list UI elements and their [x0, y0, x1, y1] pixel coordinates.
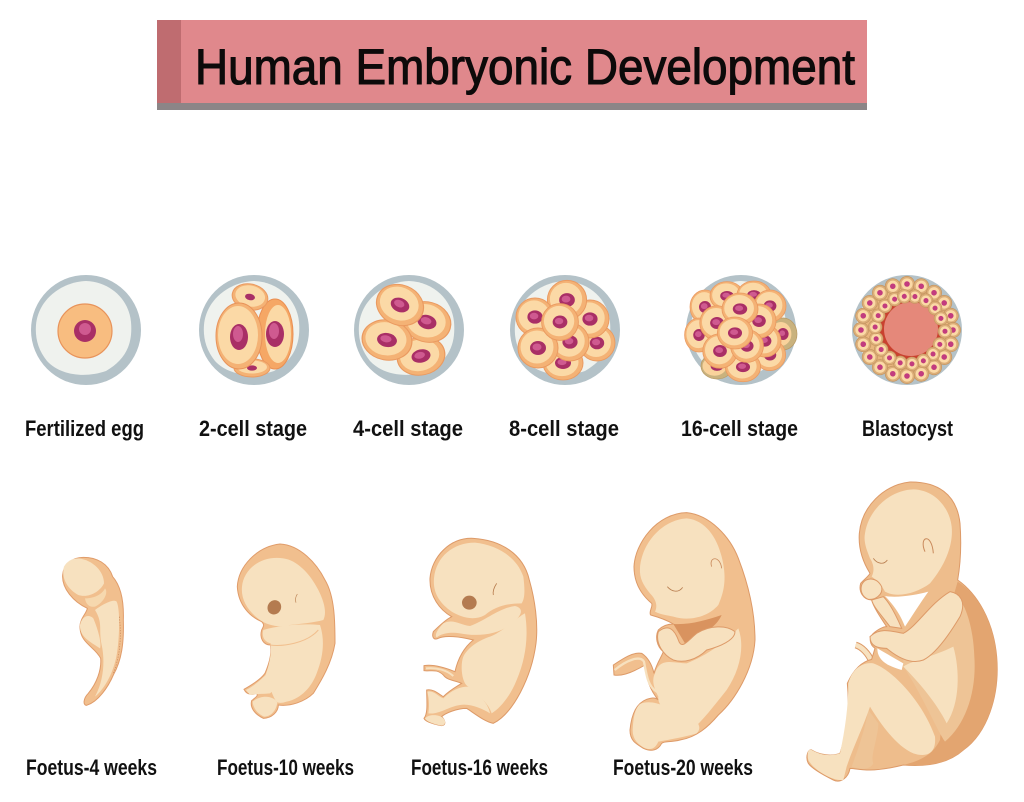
stage: blastocyst	[852, 275, 962, 441]
label: 16-cell stage: 16-cell stage	[681, 416, 798, 441]
label: blastocyst: Blastocyst	[862, 416, 954, 441]
label: 2-cell stage: 2-cell stage	[199, 416, 307, 441]
label: foetus 10 weeks: Foetus-10 weeks	[217, 755, 354, 780]
foetus at 20 weeks	[613, 513, 755, 780]
title banner	[157, 20, 867, 110]
stage: fertilized egg	[25, 275, 144, 441]
stage: 4-cell	[353, 275, 464, 441]
foetus at 16 weeks	[411, 538, 548, 780]
stage: 2-cell	[199, 275, 309, 441]
stage: 16-cell	[681, 275, 798, 441]
label: 4-cell stage: 4-cell stage	[353, 416, 463, 441]
label: 8-cell stage: 8-cell stage	[509, 416, 619, 441]
title: Human Embryonic Development	[195, 39, 855, 95]
label: foetus 20 weeks: Foetus-20 weeks	[613, 755, 753, 780]
stage: 8-cell	[509, 275, 620, 441]
label: foetus 16 weeks: Foetus-16 weeks	[411, 755, 548, 780]
foetus near term	[807, 482, 997, 781]
foetus at 10 weeks	[217, 544, 354, 780]
label: fertilized egg: Fertilized egg	[25, 416, 144, 441]
foetus at 4 weeks	[26, 557, 157, 780]
label: foetus 4 weeks: Foetus-4 weeks	[26, 755, 157, 780]
